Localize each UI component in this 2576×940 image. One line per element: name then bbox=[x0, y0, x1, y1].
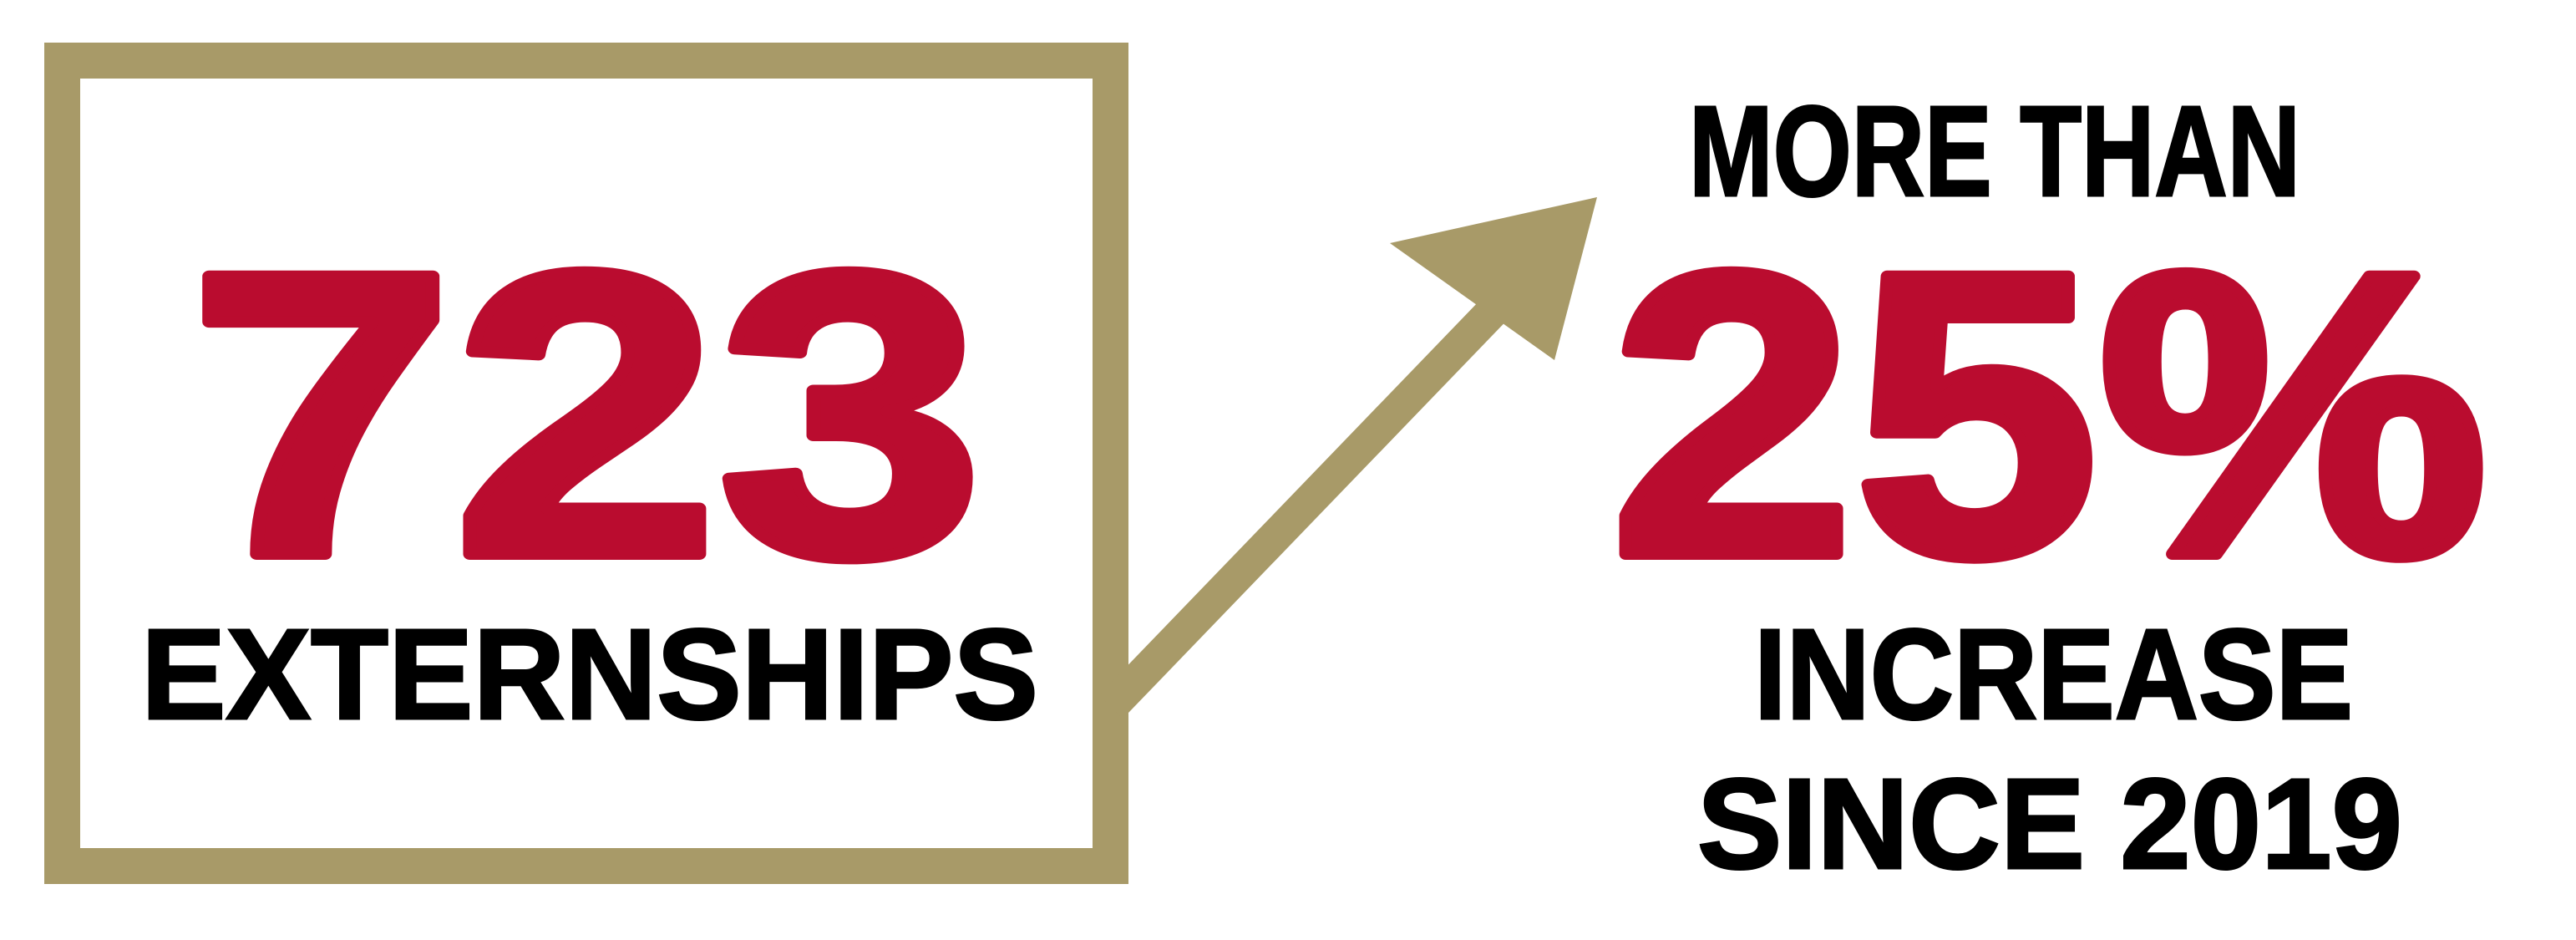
arrow: increase bbox=[1111, 197, 1597, 707]
number: 25%: 25% bbox=[1610, 188, 2488, 639]
stat block: 25% increase bbox=[1610, 79, 2488, 896]
number: 723: 723 bbox=[189, 189, 983, 639]
text: increase: INCREASE bbox=[1754, 602, 2353, 746]
label: externships: EXTERNSHIPS bbox=[141, 602, 1038, 746]
text: more than: MORE THAN bbox=[1689, 79, 2300, 223]
text: since 2019: SINCE 2019 bbox=[1697, 752, 2402, 896]
panel: externships box bbox=[62, 60, 1111, 866]
